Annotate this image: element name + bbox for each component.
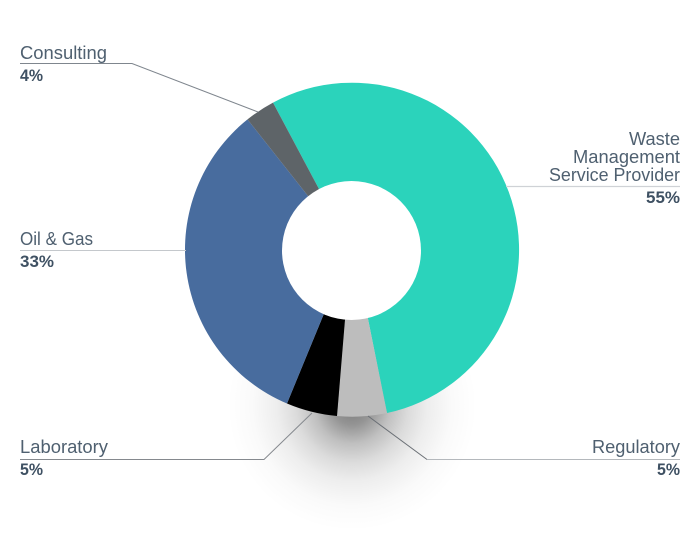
leader line: Laboratory [20, 413, 312, 460]
label: Oil & Gas: 33% [20, 252, 54, 271]
label: Waste Management Service Provider: Management [573, 147, 680, 167]
leader line: Waste Management [506, 186, 680, 188]
leader line: Oil & Gas [20, 250, 186, 252]
label: Consulting: 4% [20, 66, 43, 85]
label: Waste Management Service Provider [549, 129, 680, 207]
label: Regulatory [592, 437, 680, 479]
label: Regulatory: Regulatory [592, 437, 680, 457]
label: Consulting: Consulting [20, 43, 107, 63]
label: Waste Management Service Provider: 55% [646, 188, 680, 207]
slice: Laboratory 5% [287, 250, 352, 416]
label: Oil & Gas [20, 229, 93, 271]
slice: Waste Management Service Provider 55% [273, 83, 519, 413]
chart shadow [227, 281, 477, 531]
donut hole [282, 181, 421, 320]
label: Laboratory [20, 437, 108, 479]
leader line: Consulting [20, 64, 258, 112]
slice: Consulting 4% [248, 103, 352, 250]
slice: Oil & Gas 33% [185, 119, 352, 404]
label: Waste Management Service Provider: Waste [629, 129, 680, 149]
label: Laboratory: 5% [20, 460, 43, 479]
label: Regulatory: 5% [657, 460, 680, 479]
slice: Regulatory 5% [337, 250, 387, 417]
donut chart [185, 83, 519, 417]
label: Waste Management Service Provider: Service Provider [549, 165, 680, 185]
label: Oil & Gas: Oil & Gas [20, 229, 93, 249]
label: Laboratory: Laboratory [20, 437, 108, 457]
label: Consulting [20, 43, 107, 85]
leader line: Regulatory [368, 416, 680, 460]
